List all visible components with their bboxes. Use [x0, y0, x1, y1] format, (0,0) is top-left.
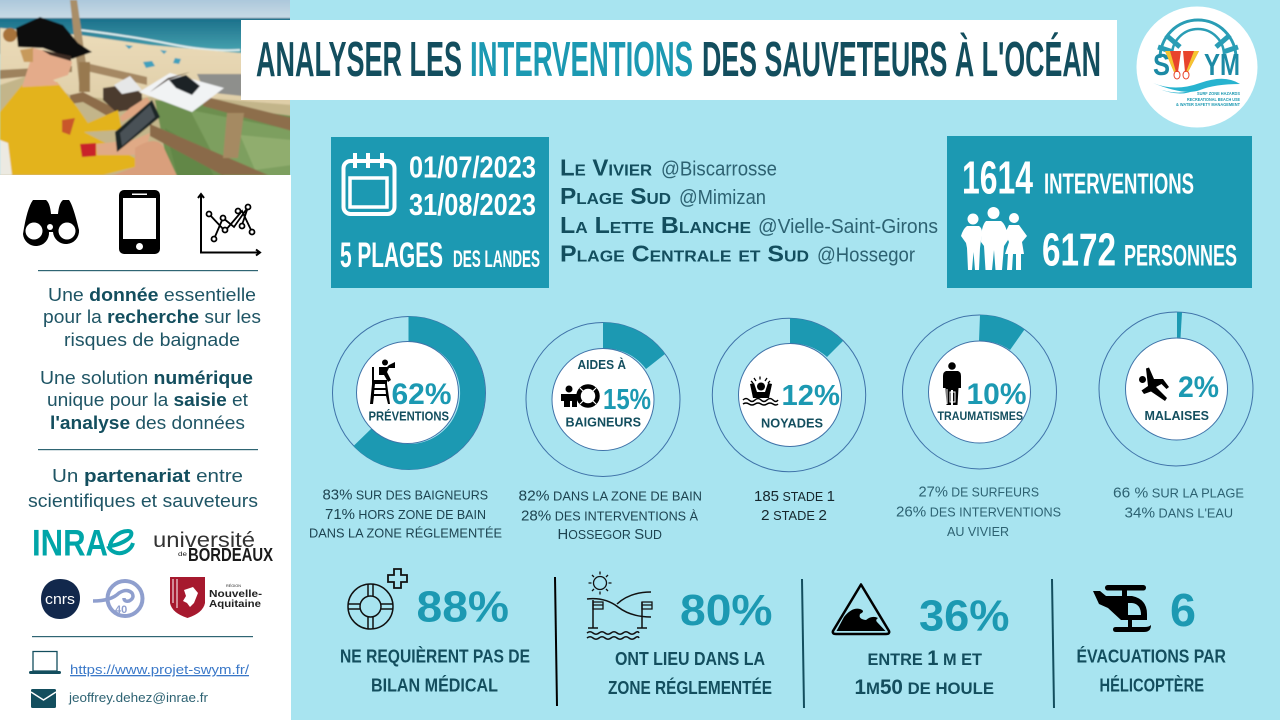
stat: 88% no medical assessment	[340, 569, 530, 696]
donut: préventions 62%: PRÉVENTIONS	[368, 408, 449, 424]
text: email address: jeoffrey.dehez@inrae.fr	[68, 691, 208, 705]
logo: université de Bordeaux: de	[178, 552, 188, 558]
text block: partnership	[28, 466, 258, 511]
stat: 6 helicopter evacuations: 6	[1170, 584, 1196, 636]
icon: binoculars	[23, 200, 79, 246]
text block: beach list: Plage Sud	[560, 183, 671, 209]
logo: SWYM: & WATER SAFETY MANAGEMENT	[1176, 102, 1240, 107]
stat: 36% swell: ENTRE 1 M ET	[868, 647, 983, 670]
icon: wave warning triangle	[833, 584, 889, 634]
text block: beach list: @Mimizan	[679, 187, 766, 209]
text block: beach list	[560, 154, 938, 266]
logo: SWYM	[1136, 6, 1258, 128]
text block: noyades details	[754, 488, 835, 524]
icon: mail envelope	[31, 689, 56, 708]
stat: 6 helicopter evacuations: HÉLICOPTÈRE	[1100, 674, 1204, 696]
icon: supervised beach flags	[587, 572, 652, 639]
stat: 88% no medical assessment: NE REQUIÈRENT PAS DE	[340, 646, 530, 666]
text block: préventions details	[309, 486, 502, 540]
text block: partnership: Un partenariat entre	[52, 466, 243, 486]
donut: traumatismes 10%: TRAUMATISMES	[938, 409, 1023, 423]
donut: traumatismes 10%: 10%	[966, 378, 1026, 411]
logo: Région Nouvelle-Aquitaine: RÉGION	[226, 583, 241, 588]
stat: 88% no medical assessment: BILAN MÉDICAL	[371, 674, 498, 696]
panel: dates and beaches count: 31/08/2023	[409, 187, 536, 222]
logo: université de Bordeaux: BORDEAUX	[188, 545, 273, 565]
donut: noyades 12%: NOYADES	[761, 416, 823, 430]
text block: traumatismes details: AU VIVIER	[947, 525, 1009, 539]
stat: 80% in supervised zone	[587, 572, 772, 698]
icon: helicopter	[1093, 585, 1151, 632]
text block: préventions details: 71% HORS ZONE DE BAIN	[325, 506, 486, 523]
text block: aides details: HOSSEGOR SUD	[558, 526, 662, 543]
text block: beach list: @Vielle-Saint-Girons	[758, 216, 938, 238]
stat: 36% swell: 1M50 DE HOULE	[854, 676, 994, 699]
panel: left white sidebar	[0, 175, 291, 720]
panel: totals: INTERVENTIONS	[1044, 168, 1194, 200]
title banner: ANALYSER LES	[256, 33, 462, 87]
text block: digital solution: l'analyse des données	[50, 413, 245, 433]
donut: aides à baigneurs 15%: AIDES À	[578, 357, 626, 372]
logo: SWYM: SURF ZONE HAZARDS	[1197, 91, 1240, 96]
panel: totals: 1614	[962, 152, 1033, 204]
text block: malaises details	[1113, 484, 1244, 522]
logo: CNRS: cnrs	[45, 591, 75, 608]
donut: malaises 2%	[1099, 312, 1253, 466]
stat: 80% in supervised zone: 80%	[680, 586, 772, 635]
donut: noyades 12%: 12%	[782, 380, 840, 412]
text block: research data: Une donnée essentielle	[48, 285, 256, 305]
text block: traumatismes details	[896, 484, 1061, 539]
logo: université de Bordeaux	[153, 529, 273, 565]
logo: Région Nouvelle-Aquitaine: Aquitaine	[209, 598, 261, 610]
panel: dates and beaches count: DES LANDES	[453, 246, 540, 273]
text block: noyades details: 2 STADE 2	[761, 507, 827, 524]
icon: life ring with cross	[348, 569, 407, 629]
panel: totals: 6172	[1042, 224, 1116, 276]
logo: 40 anniversary wave	[93, 581, 142, 616]
stat: 6 helicopter evacuations	[1076, 584, 1226, 696]
logo: Région Nouvelle-Aquitaine: Nouvelle-	[209, 588, 263, 600]
text block: aides details	[518, 488, 702, 543]
icon: falling person	[1139, 368, 1169, 401]
text block: digital solution: Une solution numérique	[40, 368, 253, 388]
logo: Région Nouvelle-Aquitaine	[170, 577, 263, 618]
panel: dates and beaches count: 5 PLAGES	[340, 236, 443, 275]
logo: SWYM: YM	[1204, 47, 1240, 82]
logo: 40 anniversary wave: 40	[115, 604, 127, 616]
panel: dates and beaches count: 01/07/2023	[409, 150, 536, 184]
donut: aides à baigneurs 15%: 15%	[603, 384, 651, 416]
donut: traumatismes 10%	[902, 315, 1056, 469]
stat: 36% swell: 36%	[919, 592, 1010, 640]
donut: noyades 12%	[712, 318, 866, 472]
text block: research data: pour la recherche sur les	[43, 307, 261, 327]
icon: rescuer with life ring	[561, 386, 598, 407]
text block: préventions details: 83% SUR DES BAIGNEURS	[322, 486, 488, 504]
title banner	[241, 20, 1117, 100]
icon: line chart	[198, 194, 260, 256]
icon: lifeguard chair	[370, 360, 395, 404]
text block: beach list: @Hossegor	[817, 244, 915, 266]
stat: 88% no medical assessment: 88%	[416, 582, 509, 632]
text block: partnership: scientifiques et sauveteurs	[28, 491, 258, 511]
logo: CNRS	[41, 579, 80, 619]
donut: malaises 2%: 2%	[1178, 371, 1219, 404]
text block: traumatismes details: 27% DE SURFEURS	[918, 484, 1039, 500]
text block: digital solution	[40, 368, 253, 433]
text block: traumatismes details: 26% DES INTERVENTIONS	[896, 504, 1061, 520]
icon: drowning person	[743, 376, 778, 405]
icon: smartphone	[119, 190, 160, 254]
donut: malaises 2%: MALAISES	[1144, 408, 1209, 423]
photo: lifeguard with tablet on the beach	[0, 0, 292, 178]
text block: beach list: La Lette Blanche	[560, 212, 751, 238]
donut: préventions 62%	[332, 316, 486, 470]
stat: 80% in supervised zone: ONT LIEU DANS LA	[615, 649, 765, 669]
logo: SWYM: S	[1153, 47, 1170, 82]
text block: aides details: 82% DANS LA ZONE DE BAIN	[518, 488, 702, 504]
stat: 6 helicopter evacuations: ÉVACUATIONS PAR	[1076, 646, 1226, 666]
text block: malaises details: 34% DANS L'EAU	[1124, 504, 1233, 522]
logo: SWYM: RECREATIONAL BEACH USE	[1187, 97, 1240, 102]
icon: laptop	[29, 652, 61, 674]
icon: calendar	[344, 153, 394, 214]
panel: dates and beaches count	[331, 137, 549, 288]
text block: research data: risques de baignade	[64, 330, 240, 350]
title banner: INTERVENTIONS	[470, 33, 693, 87]
text block: digital solution: unique pour la saisie et	[47, 390, 248, 410]
donut: aides à baigneurs 15%	[526, 322, 680, 476]
text block: malaises details: 66 % SUR LA PLAGE	[1113, 484, 1244, 502]
stat: 36% swell	[833, 584, 1010, 699]
text block: beach list: Plage Centrale et Sud	[560, 240, 809, 266]
stat: 80% in supervised zone: ZONE RÉGLEMENTÉE	[608, 677, 772, 698]
text block: préventions details: DANS LA ZONE RÉGLEMENTÉE	[309, 526, 502, 540]
logo: INRAE: INRA	[32, 522, 108, 564]
icon: family group	[961, 207, 1027, 270]
panel: totals	[947, 136, 1252, 288]
text block: research data	[43, 285, 261, 350]
text block: beach list: @Biscarrosse	[661, 158, 777, 180]
logo: université de Bordeaux: université	[153, 529, 255, 552]
text block: aides details: 28% DES INTERVENTIONS À	[521, 508, 699, 524]
text block: noyades details: 185 STADE 1	[754, 488, 835, 505]
link: project website: https://www.projet-swym.fr/	[70, 662, 249, 677]
donut: préventions 62%: 62%	[392, 378, 452, 411]
text block: beach list: Le Vivier	[560, 154, 652, 180]
icon: injured person with splint	[943, 362, 961, 405]
donut: aides à baigneurs 15%: BAIGNEURS	[566, 414, 641, 430]
